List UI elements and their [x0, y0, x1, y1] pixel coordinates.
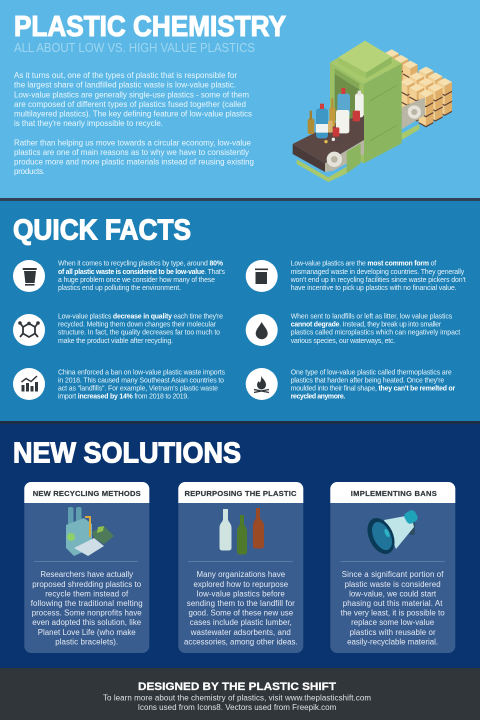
intro paragraph 1: Low-value plastics are generally single-use plastics - some of them — [14, 90, 249, 99]
intro paragraph 2: produce more and more plastic materials instead of reusing existing — [14, 157, 254, 166]
fact 3 — [13, 368, 226, 400]
text: act as "landfills". For example, Vietnam's plastic waste — [58, 386, 218, 392]
card text: plastic waste is considered — [345, 580, 441, 589]
text: One type of low-value plastic called thermoplastics are — [291, 370, 452, 376]
text: a huge problem once we consider how many of these — [58, 277, 215, 284]
card text — [341, 570, 445, 646]
text: mismanaged waste in developing countries. They generally — [291, 269, 465, 276]
text: China enforced a ban on low-value plastic waste imports — [58, 370, 226, 376]
machine body — [330, 41, 402, 163]
text: of all plastic waste is considered to be low-value. That's — [58, 269, 226, 276]
intro paragraph 1: is that they're nearly impossible to recycle. — [14, 119, 163, 128]
card text: plastics with reusable or — [350, 628, 436, 637]
intro paragraph 1: are composed of different types of plastics fused together (called — [14, 100, 246, 109]
footer credits: Icons used from Icons8. Vectors used from Freepik.com — [138, 703, 337, 712]
card text: replace some low-value — [351, 618, 435, 627]
footer heading: DESIGNED BY THE PLASTIC SHIFT — [138, 681, 336, 693]
card text: good. Some of these new use — [188, 608, 294, 618]
icon: molecule — [13, 314, 45, 346]
card text: process. Some nonprofits have — [32, 608, 142, 618]
intro paragraph 1 — [14, 71, 252, 128]
text — [58, 370, 226, 400]
card text: explored how to repurpose — [194, 580, 289, 589]
icon: fire — [246, 368, 278, 400]
text: make the product viable after recycling. — [58, 338, 173, 345]
card header — [330, 482, 455, 503]
panel: intro — [0, 0, 480, 198]
fact 4 — [246, 260, 466, 292]
text: won't end up in recycling facilities since waste pickers don't — [290, 277, 466, 284]
icon: bottles — [220, 508, 264, 554]
divider bar — [0, 198, 480, 201]
illustration: conveyor machine — [293, 41, 452, 182]
subtitle: ALL ABOUT LOW VS. HIGH VALUE PLASTICS — [14, 40, 255, 55]
card header: NEW RECYCLING METHODS — [33, 489, 141, 498]
text: Low-value plastics are the most common form of — [291, 260, 436, 268]
card text: plastic bracelets). — [55, 638, 118, 646]
icon: megaphone — [362, 509, 419, 558]
intro paragraph 1: As it turns out, one of the types of plastic that is responsible for — [14, 71, 237, 80]
card text: Researchers have actually — [40, 570, 133, 579]
text: When sent to landfills or left as litter, low value plastics — [291, 314, 453, 320]
card text: recycle them instead of — [45, 590, 129, 598]
card text: cases include plastic lumber, — [190, 618, 292, 627]
text: plastics that harden after being heated. Once they're — [291, 378, 444, 384]
card text: proposed shredding plastics to — [32, 580, 142, 589]
card text: the very least, it is possible to — [341, 608, 445, 618]
intro paragraph 2: products. — [14, 167, 45, 176]
card: repurposing the plastic — [178, 482, 303, 653]
cube bales — [384, 49, 452, 127]
footer credits — [103, 693, 371, 712]
card text: following the traditional melting — [31, 599, 143, 608]
icon: recycling factory — [66, 507, 114, 556]
text: Low-value plastics decrease in quality each time they're — [58, 314, 223, 320]
intro paragraph 2 — [14, 138, 254, 176]
text: plastics called microplastics which can negatively impact — [291, 330, 460, 336]
text: have incentive to pick up plastics with no financial value. — [291, 285, 457, 292]
text — [291, 370, 456, 400]
text — [290, 260, 466, 292]
card: implementing bans — [330, 482, 455, 653]
icon: cup — [13, 260, 45, 292]
text: recycled. Melting them down changes their molecular — [58, 322, 217, 328]
panel: footer — [0, 668, 480, 720]
fact 2 — [13, 314, 223, 346]
bottles on belt — [308, 88, 364, 143]
card text: phasing out this material. At — [343, 599, 443, 608]
card text — [31, 570, 143, 646]
text: recycled anymore. — [291, 394, 345, 400]
card text: even adopted this solution, like — [32, 618, 142, 627]
card text: Many organizations have — [196, 570, 286, 579]
card header: REPURPOSING THE PLASTIC — [184, 489, 297, 498]
text: structure. In fact, the quality decreases far too much to — [58, 330, 220, 336]
intro paragraph 1: the largest share of landfilled plastic waste is low-value plastic. — [14, 81, 236, 90]
text: moulded into their final shape, they can't be remelted or — [291, 386, 456, 392]
card text: accessories, among other ideas. — [184, 638, 298, 646]
title: PLASTIC CHEMISTRY — [14, 11, 286, 43]
intro paragraph 2: Rather than helping us move towards a circular economy, low-value — [14, 138, 252, 147]
footer credits: To learn more about the chemistry of plastics, visit www.theplasticshift.com — [103, 693, 371, 702]
card text: Planet Love Life (who make — [38, 628, 136, 637]
text: various species, our waterways, etc. — [291, 338, 395, 345]
fact 6 — [246, 368, 456, 400]
left conveyor — [293, 115, 364, 182]
text — [58, 260, 226, 292]
icon: oil drop — [246, 314, 278, 346]
intro paragraph 1: multilayered plastics). The key defining feature of low-value plastics — [14, 109, 252, 118]
text: plastics end up polluting the environment. — [58, 285, 181, 292]
card text: low-value plastics before — [197, 590, 285, 598]
card text: Since a significant portion of — [342, 570, 444, 579]
text: When it comes to recycling plastics by type, around 80% — [58, 260, 223, 268]
fact 1 — [13, 260, 226, 292]
text: in 2018. This caused many Southeast Asian countries to — [58, 378, 224, 384]
icon: chart — [13, 368, 45, 400]
card text: low-value, we could start — [349, 590, 437, 598]
intro paragraph 2: plastics are one of main reasons as to why we have to consistently — [14, 148, 249, 157]
icon: trash can — [246, 260, 278, 292]
panel: quick facts — [0, 201, 480, 421]
text — [291, 314, 460, 345]
divider bar — [0, 421, 480, 424]
text: import increased by 14% from 2018 to 2019. — [58, 394, 189, 400]
card text — [184, 570, 298, 646]
card text: sending them to the landfill for — [187, 599, 295, 608]
right conveyor — [402, 97, 425, 140]
card header: IMPLEMENTING BANS — [351, 489, 437, 498]
heading: quick facts: QUICK FACTS — [13, 214, 191, 246]
fact 5 — [246, 314, 460, 346]
card text: easily-recyclable material. — [347, 638, 438, 646]
panel: new solutions — [0, 424, 480, 669]
card header — [178, 482, 303, 503]
text — [58, 314, 223, 345]
heading: new solutions: NEW SOLUTIONS — [13, 438, 241, 470]
card header — [24, 482, 149, 503]
card text: wastewater adsorbents, and — [190, 628, 291, 637]
card: new recycling methods — [24, 482, 149, 653]
text: cannot degrade. Instead, they break up into smaller — [291, 322, 442, 328]
